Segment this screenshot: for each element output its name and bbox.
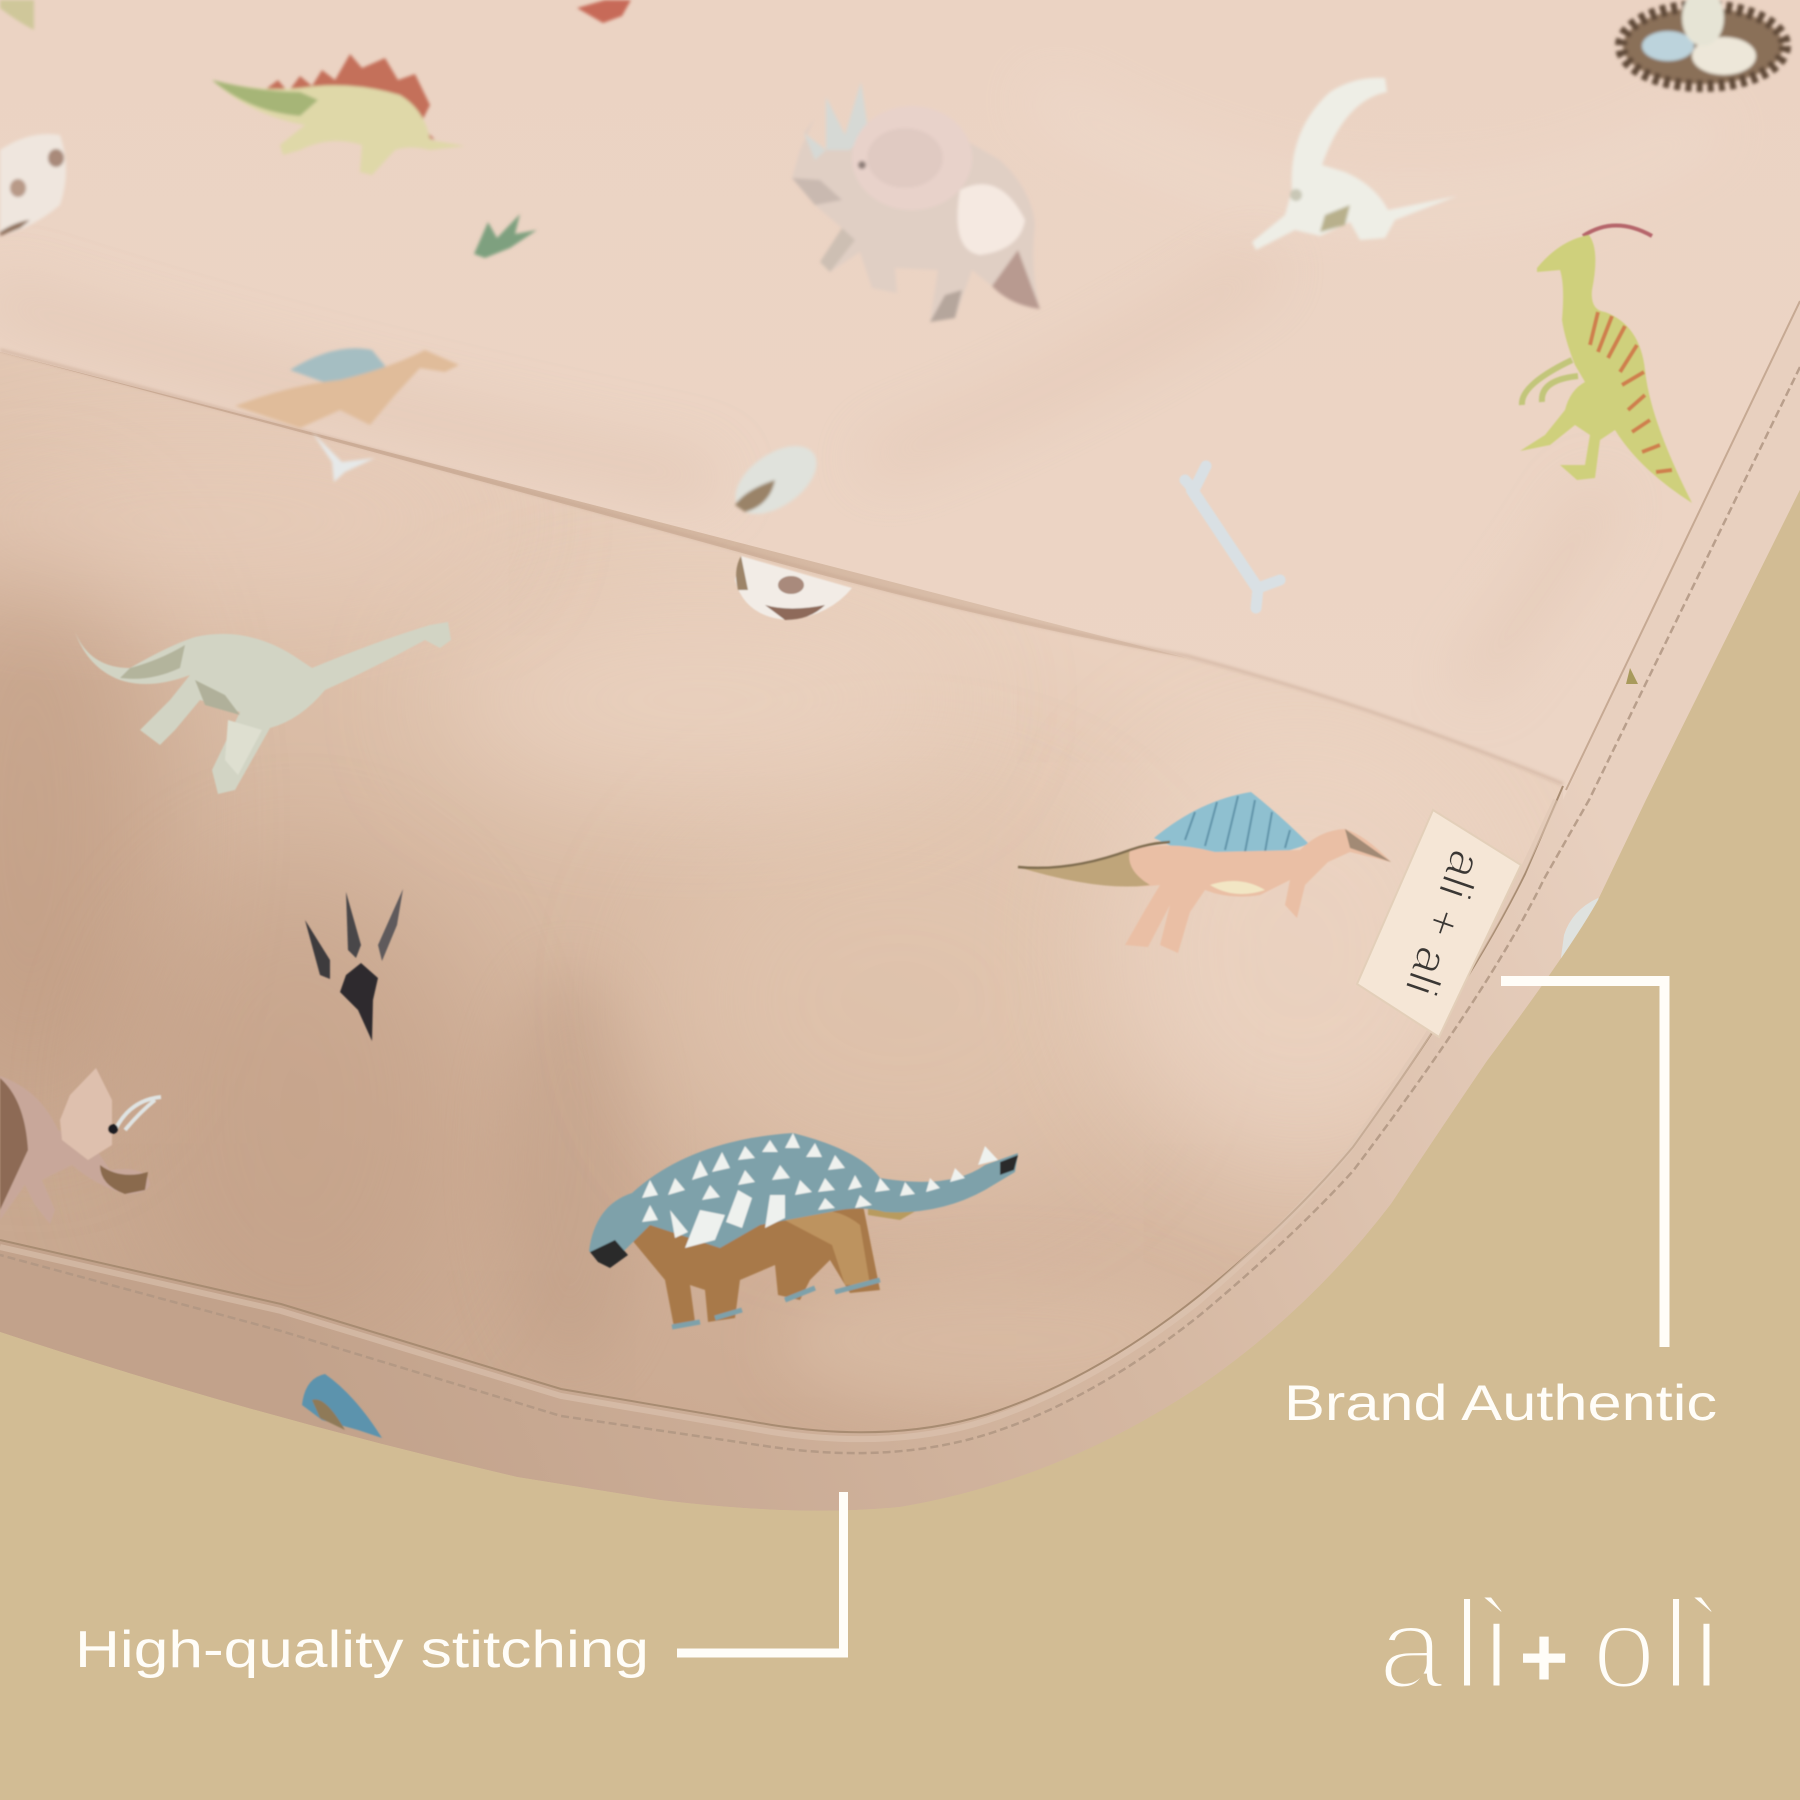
tag text: ali + ali	[1395, 844, 1493, 1003]
front pocket	[0, 352, 1314, 1210]
dinosaur: top-left leaf fragment	[0, 0, 34, 30]
dinosaur: white sauropod	[1252, 78, 1457, 250]
upper bib surface	[0, 0, 1532, 768]
footprint	[305, 889, 403, 1041]
binding roll highlight	[0, 800, 1556, 1439]
seam inner right	[1566, 301, 1800, 790]
leaf	[474, 214, 537, 258]
cut egg	[735, 556, 852, 620]
logo: ì	[1479, 1574, 1514, 1715]
logo: a	[1378, 1583, 1444, 1713]
dinosaur: brachiosaurus	[75, 622, 451, 794]
dinosaur: parasaurolophus	[1520, 226, 1692, 503]
small print fragment at seam	[1626, 668, 1638, 684]
binding stitching	[0, 367, 1800, 1453]
callout: stitching label: High-quality stitching	[75, 1621, 649, 1679]
dinosaur: spinosaurus behind fold	[235, 348, 459, 428]
nest with eggs	[1621, 0, 1785, 86]
front pocket prints	[0, 556, 1391, 1327]
callout: brand authentic label: Brand Authentic	[1284, 1375, 1717, 1431]
woven label tag	[1357, 810, 1521, 1037]
dinosaur: partial ankylosaurus at hem	[302, 1374, 382, 1438]
bone fragment	[312, 432, 375, 482]
logo: +	[1519, 1610, 1569, 1704]
logo: ì	[1689, 1574, 1724, 1715]
bone large	[1185, 466, 1280, 608]
callout: brand authentic connector	[1501, 981, 1664, 1347]
pocket seam	[0, 786, 1563, 1432]
logo: l	[1453, 1574, 1481, 1715]
pocket fold shadow	[0, 350, 1563, 784]
grey underside along edge	[1561, 898, 1599, 958]
callout: stitching connector	[677, 1492, 844, 1653]
bib binding edge	[0, 304, 1800, 1510]
logo: l	[1662, 1574, 1690, 1715]
dinosaur: ankylosaurus	[589, 1133, 1018, 1327]
pocket shadows	[0, 599, 1426, 1392]
dinosaur: triceratops bottom-left	[0, 1068, 161, 1224]
small egg	[723, 432, 829, 528]
egg left	[0, 134, 66, 236]
upper bib folds	[1086, 1263, 1238, 1370]
dinosaur: pale triceratops	[792, 82, 1040, 322]
logo: o	[1592, 1583, 1656, 1713]
dinosaur: stegosaurus	[212, 54, 465, 175]
logo	[1378, 1574, 1724, 1715]
dinosaur: spinosaurus	[1018, 792, 1391, 953]
dinosaur: red fragment top	[577, 0, 631, 23]
